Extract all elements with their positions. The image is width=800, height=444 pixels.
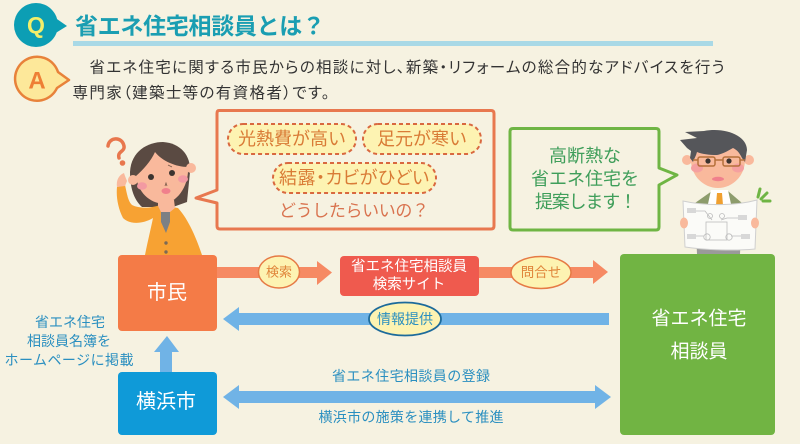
illustration: advisor with blueprint <box>680 130 770 254</box>
cheeks <box>137 182 147 190</box>
icon: emphasis ticks <box>758 189 770 201</box>
pill: high utility costs: 光熱費が高い <box>238 129 346 149</box>
eyes <box>148 174 154 180</box>
hair <box>680 130 747 162</box>
speech bubble: advisor proposal <box>510 128 677 230</box>
pill: condensation and mold: 結露・カビがひどい <box>279 168 429 188</box>
icon: A badge <box>15 57 69 101</box>
proposal text: 省エネ住宅を <box>531 169 639 189</box>
caption: policy cooperation: 横浜市の施策を連携して推進 <box>318 409 504 425</box>
box: citizen <box>118 255 217 331</box>
box: advisor search site: 省エネ住宅相談員 <box>351 258 467 275</box>
arrow: citizen to search site <box>217 256 332 288</box>
title underline <box>73 41 713 46</box>
buttons <box>164 241 168 245</box>
neck <box>158 200 175 212</box>
ears <box>682 155 692 165</box>
box: advisor search site: 検索サイト <box>373 276 445 293</box>
pill: high utility costs <box>228 124 356 154</box>
icon: A badge: A <box>28 68 46 94</box>
face <box>691 132 745 188</box>
trousers <box>697 248 740 254</box>
pill: condensation and mold <box>273 163 436 193</box>
ears <box>128 175 138 185</box>
shirt <box>708 190 731 204</box>
box: advisor: 相談員 <box>670 340 728 362</box>
answer block <box>15 57 724 102</box>
icon: question mark <box>108 139 125 166</box>
icon: Q badge: Q <box>27 12 45 38</box>
label: search: 検索 <box>266 264 292 280</box>
caption: published list: 省エネ住宅 <box>35 314 105 330</box>
arrow: Yokohama to citizen <box>154 336 179 372</box>
hands <box>680 218 688 228</box>
box: advisor search site <box>340 256 479 296</box>
pill: cold feet <box>363 124 481 154</box>
box: advisor: 省エネ住宅 <box>651 308 747 330</box>
nose and brow <box>165 165 172 186</box>
hand <box>117 173 127 187</box>
speech bubble: citizen worries <box>196 110 494 229</box>
label: information provision <box>369 302 441 336</box>
inner shirt <box>161 212 170 233</box>
tie <box>716 193 723 205</box>
question text: どうしたらいいの？ <box>279 202 429 220</box>
face <box>136 152 188 204</box>
proposal text <box>531 146 639 212</box>
arrow: information provision <box>223 302 609 336</box>
box: Yokohama City: 横浜市 <box>136 390 196 413</box>
label: inquiry: 問合せ <box>521 265 561 280</box>
jacket <box>695 191 742 254</box>
proposal text: 提案します！ <box>535 192 637 212</box>
cheeks <box>691 164 703 172</box>
eyes <box>705 158 711 164</box>
illustration: woman with question mark <box>108 139 202 255</box>
box: Yokohama City <box>118 372 217 435</box>
back hair <box>130 142 190 207</box>
question header <box>14 3 713 47</box>
jacket and arm <box>117 185 202 255</box>
caption: published list <box>4 314 134 368</box>
caption: registration: 省エネ住宅相談員の登録 <box>332 368 490 384</box>
blueprint <box>683 200 757 250</box>
caption: published list: ホームページに掲載 <box>4 352 134 368</box>
answer text: 省エネ住宅に関する市民からの相談に対し、新築・リフォームの総合的なアドバイスを行う <box>90 58 724 76</box>
glasses <box>693 157 745 166</box>
mouth <box>162 188 170 194</box>
arrow: Yokohama and advisor two-way <box>223 385 611 409</box>
arrow: search site to advisor <box>479 256 608 288</box>
proposal text: 高断熱な <box>549 146 621 166</box>
box: advisor <box>620 254 775 435</box>
bubble outline <box>510 128 677 230</box>
bubble outline <box>196 110 494 229</box>
icon: Q badge <box>14 3 67 47</box>
label: information provision: 情報提供 <box>377 311 433 327</box>
answer text <box>72 58 724 102</box>
mouth <box>712 177 724 181</box>
title: 省エネ住宅相談員とは？ <box>75 13 325 39</box>
answer text: 専門家（建築士等の有資格者）です。 <box>72 84 330 102</box>
caption: published list: 相談員名簿を <box>27 333 111 349</box>
box: citizen: 市民 <box>147 281 187 304</box>
pill: cold feet: 足元が寒い <box>377 129 467 149</box>
